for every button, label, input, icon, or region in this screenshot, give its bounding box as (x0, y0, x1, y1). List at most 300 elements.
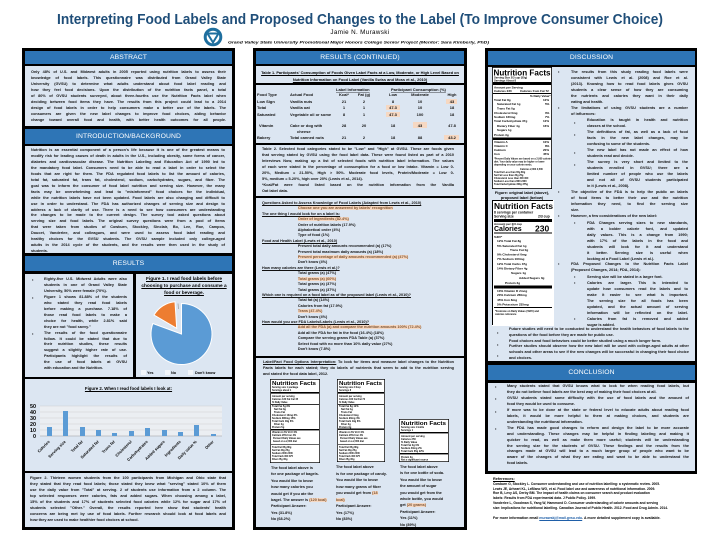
introduction text: the mandatory food label. Consumers need to be able to read a label in order to select the (31, 166, 225, 170)
discussion sub-points: confusing to some of the students. (587, 142, 650, 146)
references: labels: Results from FDA experimental data. J Public Policy. 1999. (493, 496, 596, 500)
table notes text: 5%, medium = 5-20%, high over 20% (Lewis et al., 2014). (262, 177, 363, 181)
data table: Low (389, 92, 398, 97)
nutrition label 2: Sat Fat 1g (341, 408, 353, 411)
data table: 10 (418, 105, 423, 110)
conclusion text: and understanding. These changes may be helpful in finding labeling and making it (507, 432, 689, 436)
discussion point 1: students a clear sense of how they are consuming (571, 88, 688, 92)
discussion notes: Further studies should observe how the new label will be used with college-aged adults at other (509, 344, 689, 348)
data table: High (448, 92, 457, 97)
introduction text: serving size and food labels. The original survey questions were from a pool of items (31, 219, 225, 223)
nutrition facts original label: Sat Fat Less than 20g 25g (494, 174, 524, 177)
author name: Jamie N. Murawski (330, 29, 390, 36)
nutrition label 1: Sat Fat 3g (274, 408, 286, 411)
data table: Actual Food (290, 92, 314, 97)
nutrition label 1: Calories 130 Fat Cal 45 (272, 398, 299, 401)
nutrition label 2: Sodium 2400 2400 (339, 452, 360, 455)
nutrition facts proposed label: Protein 3g (505, 281, 520, 285)
data table: 43 (450, 99, 455, 104)
label 2 caption: kcal) (336, 498, 345, 502)
discussion point 5: FDA Proposed Changes to the Nutrition Facts Label (571, 262, 688, 266)
discussion notes (509, 327, 689, 360)
nutrition facts original label: 7% (545, 115, 550, 119)
discussion point 3 (571, 190, 688, 212)
table notes text: *Kcal/Fat were found listed based on the nutrition information from the Vanilla (262, 183, 454, 187)
discussion notes: Future studies will need to be conducted to understand the health behaviors of food labels to the (509, 327, 689, 331)
bar chart: Added sugars (144, 439, 166, 461)
data table: Moderate (411, 92, 430, 97)
nutrition label 1: Calcium 20% Iron 4% (272, 434, 297, 437)
label 2 caption: you would get from (18 (336, 491, 378, 495)
data table: Cake or dog with (290, 123, 323, 128)
nutrition label 2: Fiber 25g 30g (339, 458, 355, 461)
legend (141, 370, 216, 375)
nutrition label 3: Amount per serving (401, 435, 425, 438)
chart title: food or beverage. (164, 291, 204, 296)
abstract text: change toward overall food and health, with better health outcomes for all people. (31, 118, 226, 122)
bar chart (30, 404, 222, 462)
nutrition facts proposed label: 20% Calcium 260mg (497, 293, 527, 297)
nutrition facts original label (492, 67, 552, 189)
nutrition facts original label: Servings About 8 (494, 78, 517, 82)
panel: figure 1 pie chart (136, 274, 232, 377)
label 3 caption: Yes (11%) (400, 516, 418, 520)
discussion sub-points: The definitions of fat, as well as a lack of food (587, 130, 688, 134)
table notes text: 20%, Medium = 21-50%, High > 50%. Moderate food levels, Protein/Moderate = Low 0- (262, 171, 454, 175)
nutrition facts proposed label: 5% Potassium 235mg (497, 302, 529, 306)
conclusion text: changes made at GVSU will lead to a much larger group of people who want to be (507, 449, 689, 453)
bar chart: 10 (30, 428, 36, 434)
panel: abstract (25, 66, 232, 126)
introduction text: Doucet, Vanderlee, and colleagues, and were used to assess food label reading and (31, 231, 225, 235)
discussion sub-points 3: updated, and the actual amount of serving (587, 305, 688, 309)
nutrition facts original label: Cholesterol Less than 300 300 (494, 177, 529, 180)
nutrition facts original label: Total Fat Less than 65g 80g (494, 171, 526, 174)
nutrition facts proposed label: 8 servings per container (494, 210, 534, 214)
nutrition label 1: Protein 5g (272, 426, 285, 429)
references: Cowburn G, Stockley L. Consumer understanding and use of nutrition labelling: a systematic review. 2005. (493, 482, 660, 486)
panel: table notes (256, 145, 464, 196)
bar chart: 40 (30, 410, 36, 416)
heading: results (25, 256, 232, 271)
results bullet text: students in one of Grand Valley State (44, 283, 127, 287)
nutrition label 2: Trans Fat (341, 411, 352, 414)
bullet marker: • (558, 105, 559, 110)
discussion sub-points 3 (587, 275, 688, 327)
conclusion text: labels, it would be more helpful to them at making choices, and students are (507, 414, 689, 418)
discussion sub-points 3: update how consumers read the labels and to (587, 287, 688, 291)
discussion sub-points: classes at the school. (587, 124, 626, 128)
panel: figure 2 bar chart (25, 379, 232, 471)
data table: 1 (363, 105, 366, 110)
discussion sub-points 2: daily values. This is a change from 1990; (587, 233, 688, 237)
table notes text: Oat label data. (262, 189, 288, 193)
chart title: Figure 2. When I read food labels I look at: (85, 386, 172, 391)
data table: Label Information (336, 87, 370, 92)
nutrition label 2: Total Carb 19g 6% (339, 420, 361, 423)
panel: discussion (488, 67, 695, 361)
label 1 caption: for one package of bagels. (271, 472, 319, 476)
label 1 caption: The food label above is (271, 466, 313, 470)
nutrition facts original label: 0% (545, 111, 550, 115)
label 2 caption: how many grams of fiber (336, 484, 381, 488)
bar chart: 20 (30, 422, 36, 428)
full-width bullet markers: • (497, 342, 498, 346)
abstract text: deciding between food items they have. The results from this project could lead to a 2014 (31, 100, 226, 104)
introduction text: the changes to be made to the current design. The survey tool asked questions about (31, 213, 225, 217)
heading: introduction (25, 129, 232, 144)
data table: 18 (391, 123, 396, 128)
nutrition label 2: Vitamin A 2% Vit C 6% (339, 431, 365, 434)
results bullet text: Participants highlight the results of (44, 354, 127, 358)
introduction text: facts may be overwhelming and lead to "misinformed" food choices for the individual, (31, 190, 225, 194)
bullet marker: • (558, 69, 559, 74)
discussion sub-points 2: with a bolder calorie font, and updated (587, 227, 688, 231)
discussion point 1 (571, 70, 688, 104)
nutrition label 1: Trans Fat (274, 411, 285, 414)
conclusion text: food labels. (507, 461, 528, 465)
label 1 caption: would get if you ate the (271, 492, 313, 496)
nutrition label 3: Not a significant source (401, 458, 429, 462)
nutrition label 3: Total Carb 65g 22% (401, 450, 425, 453)
references (493, 477, 668, 510)
nutrition label 3: Servings 1 (401, 429, 414, 432)
nutrition label 2: Cholesterol 0mg (339, 414, 359, 417)
nutrition facts original label: % Daily Value* (530, 94, 551, 98)
nutrition label 2: Calories 160 Cal Fat 72 (339, 398, 366, 401)
nutrition facts original label: diet. Your daily value may be higher or lower (494, 160, 545, 164)
nutrition label 1: Total Carb 18g 6% (272, 420, 294, 423)
column frame: middle (253, 48, 467, 530)
references: Roe B, Levy AS, Derby BM. The impact of health claims on consumer search and product evaluation (493, 491, 650, 495)
caption text (30, 476, 226, 522)
panel: label comparison (256, 358, 464, 527)
nutrition label 3: % Daily Value (401, 441, 418, 444)
nutrition facts original label: Serving Size 2/3 cup (55g) (494, 76, 527, 80)
results bullet text: their nutrition studies, these results (44, 342, 127, 346)
nutrition label 1: based on a 2,000 diet (273, 440, 297, 443)
results bullet text: Eighty-five U.S. Midwest Adults were also (44, 277, 127, 281)
abstract text: how they feel food decisions. Upon the distribution of the nutrition facts panel, a total (31, 88, 226, 92)
nutrition label 3: Serving size 1 bottle (401, 426, 425, 429)
references: References: (493, 477, 515, 481)
data table: 2 (363, 135, 366, 140)
nutrition label 1: Fiber 2g (274, 423, 284, 426)
nutrition facts proposed label: Amount per 2/3 cup (494, 222, 522, 226)
nutrition label 1: Vitamin A 2% Vit C 6% (272, 431, 298, 434)
discussion point 3: size. (571, 208, 579, 212)
discussion sub-points: and not all of GVSU students participated (587, 178, 688, 182)
nutrition label 2: Servings 8 (339, 389, 352, 392)
nutrition facts original label: Trans Fat 0g (497, 106, 515, 110)
panel: introduction (25, 146, 232, 253)
references: size: Implications for nutritional labelling. Canadian Journal of Public Health. 2012. Food and Drug Admin. 2014. (493, 506, 668, 510)
discussion sub-points: limited number of people who use the labels (587, 172, 688, 176)
introduction text: Nutrition is an essential component of a person's life because it is one of the greatest means to (31, 148, 225, 152)
nutrition label 2: Nutrition Facts (339, 381, 382, 387)
data table: Bakery (257, 135, 271, 140)
nutrition label 2: Percent Daily Values are (340, 437, 368, 440)
full-width bullet markers: • (497, 330, 498, 335)
nutrition facts proposed label: *Footnote on Daily Values (%DV) and (495, 310, 539, 313)
discussion sub-points 3: make it easier to see what is important. (587, 293, 688, 297)
sub-bullet markers: • (574, 120, 575, 125)
nutrition label 2: Amount per serving (339, 395, 362, 398)
nutrition facts proposed label: calories reference (495, 313, 517, 316)
label 3 caption: The food label above (400, 465, 438, 469)
panel: nutrition table (256, 85, 464, 143)
nutrition facts proposed label: 230 (535, 224, 549, 234)
caption text: top selected responses were calories, fats and added sugars. When choosing among a label, (30, 494, 226, 498)
label 1 caption: You would like to know (271, 479, 313, 483)
nutrition facts proposed label: Calories (494, 226, 522, 233)
nutrition facts original label: Calories 2,000 2,500 (520, 168, 543, 171)
nutrition label 1: Servings about 1 (272, 389, 292, 392)
full-width bullet markers (497, 330, 498, 358)
discussion sub-points 2: it better. Serving size is useful when (587, 251, 688, 255)
results bullet text: choice for health, while 2.81% said (44, 319, 127, 323)
panel: table title (256, 66, 464, 83)
heading: discussion (488, 51, 695, 65)
nutrition label 3 (399, 419, 449, 462)
data table: 28 (342, 123, 347, 128)
label 1 caption: Participant Answer: (271, 504, 307, 508)
legend: Yes (147, 371, 154, 375)
nutrition facts original label: Total Carbohydrate 37g (494, 119, 527, 123)
data table: 2 (363, 99, 366, 104)
conclusion text: food they would be used to consume. (507, 402, 575, 406)
legend: Don't know (195, 371, 215, 375)
abstract text: of 80% of GVSU students surveyed, about three-fourths use the Nutrition Facts label when (31, 94, 226, 98)
label 1 caption: how many calories you (271, 485, 313, 489)
conclusion text (507, 384, 690, 465)
results bullet text (44, 277, 128, 370)
heading: abstract (25, 51, 232, 64)
nutrition facts proposed label: 7% Sodium 160mg (497, 257, 524, 261)
nutrition facts proposed label: %DV* (494, 235, 503, 239)
intro text: Label/Fact Food Options Interpretation: To look for items and measure label changes to the Nutrition (263, 360, 454, 364)
data table: 10 (418, 99, 423, 104)
bar chart: Cholesterol (114, 439, 133, 458)
pie chart (150, 301, 212, 365)
label comparison caption: Figure: original label (above), (495, 190, 549, 195)
discussion point 2 (571, 106, 688, 116)
data table: Saturated (257, 112, 276, 117)
nutrition label 1: Total Fat 65g 80g (272, 446, 292, 449)
results bullet text: with education and the Nutrition. (44, 366, 103, 370)
label 3 caption: You would like to know (400, 478, 442, 482)
heading: abstract: ABSTRACT (110, 54, 147, 61)
discussion notes: and choices. (509, 356, 532, 360)
discussion sub-points 2: FDA Changes serving sizes to new standards, (587, 221, 688, 225)
heading: conclusion (488, 365, 695, 380)
abstract text: Only 48% of U.S. and Midwest adults in 2005 reported using nutrition labels to assess their (31, 70, 226, 74)
label 3 caption: No (89%) (400, 523, 416, 527)
label 2 caption: is for one package of candy. (336, 472, 387, 476)
data table: 8 (343, 112, 346, 117)
label 3 caption: Participant Answer: (400, 510, 436, 514)
nutrition facts proposed label: 0% Cholesterol 0mg (497, 252, 527, 256)
nutrition label 2: Sodium 90mg 4% (339, 417, 360, 420)
bullet marker: • (558, 189, 559, 194)
data table: Food Type (257, 92, 278, 97)
panel: questionnaire results (256, 198, 464, 356)
discussion notes: questions of the food before they are made for public use. (509, 333, 614, 337)
bullet marker: • (495, 384, 496, 389)
results bullet text: before making a purchase. 7.18% of (44, 307, 127, 311)
sub-bullet markers: • (574, 162, 575, 167)
caption text: how they are used to make healthier food choices at school. (30, 518, 139, 522)
nutrition facts original label: Calories 230 (494, 89, 512, 93)
data table: 21 (342, 99, 347, 104)
bar chart: Ingredients (163, 439, 182, 458)
nutrition facts original label: 5% (545, 102, 550, 106)
discussion point 5 (571, 262, 688, 272)
intro text: Facts labels for each stated; they do labels of nutrients that seem to add to the nutrition serving (263, 366, 454, 370)
discussion sub-points: students enrolled in GVSU; there are a (587, 166, 688, 170)
bar chart: Other (204, 439, 215, 450)
results bullet text: University, 50% were female (70%). (44, 289, 107, 293)
panel: figure caption (25, 473, 232, 527)
nutrition facts original label: Saturated Fat 1g (497, 102, 521, 106)
data table: 21 (342, 135, 347, 140)
conclusion text: quicker to read, as well as make them more useful; students will be understanding (507, 438, 689, 442)
discussion point 3: information they need, to find the serving size (571, 202, 688, 206)
nutrition label 2: % Daily Value (339, 401, 355, 404)
nutrition facts original label: Total Fat 8g (494, 98, 511, 102)
table notes text: that serving stated by GVSU using the food label data. These were found listed as part of a 2010 (262, 153, 454, 157)
heading: results continued: RESULTS (CONTINUED) (320, 54, 400, 61)
bullet marker: • (495, 409, 496, 414)
nutrition label 2: Serving size 2 tbsp (339, 386, 361, 389)
heading: discussion: DISCUSSION (570, 54, 613, 61)
introduction text: adults in the 2014 cycle of the students, and the results were then used in the study of (31, 243, 225, 247)
caption text: 15% of the students and 17% of students selected food calories while 12% for sugar and 17% of (30, 500, 226, 504)
legend: No (171, 371, 177, 375)
nutrition facts original label: Sodium 160mg (494, 115, 516, 119)
label 1 caption (271, 466, 327, 521)
bar chart: Trans fat (101, 439, 116, 454)
sub-bullet marker: • (574, 220, 575, 225)
discussion point 1: The results from this study reading food labels were (571, 70, 688, 74)
results bullet text: suggest a slightly higher rate of use. (44, 348, 127, 352)
data table: 18 (450, 112, 455, 117)
sub-bullet markers: • (574, 132, 575, 137)
introduction text: students. (31, 249, 48, 253)
nutrition label 1 (270, 379, 320, 463)
sub-bullet markers 2 (574, 274, 576, 321)
discussion sub-points: in it (Lewis et al., 2008). (587, 184, 629, 188)
label 2 caption: Participant Answer: (336, 504, 372, 508)
nutrition facts original label: Iron (494, 152, 500, 156)
discussion sub-points 3: sugar is added. (587, 323, 615, 327)
discussion point 1: the nutrients and calories they want in their daily (571, 94, 688, 98)
nutrition facts original label: Cholesterol 0mg (494, 111, 518, 115)
chart title: Figure 1. I read food labels before (146, 277, 222, 282)
data table: 43.2 (448, 135, 457, 140)
bar chart: Saturated fat (79, 439, 100, 460)
introduction text: foods that are right for them. The FDA regulated food labels to list the amount of calories, (31, 172, 225, 176)
nutrition label 1: Percent Daily Values are (273, 437, 301, 440)
intro text: and stated the food data label, 2012. (263, 372, 328, 376)
bullet marker: • (558, 261, 559, 266)
data table: 100 (417, 112, 424, 117)
abstract text: design of food labels in order to help consumers make a better use of the labels. The (31, 106, 226, 110)
nutrition facts original label: Vitamin C (494, 144, 509, 148)
intro text (263, 360, 454, 376)
data table: Kcal* (339, 92, 349, 97)
introduction text: use in order to understand. The FDA has authorized changes of serving size and design to (31, 202, 225, 206)
discussion point 3: The objective of the FDA is to help the public on labels (571, 190, 688, 194)
caption text: they stated that they read food labels; those stated they knew what "serving" stated 10% of them (30, 482, 226, 486)
discussion sub-points 2: with 17% of the labels in the food and (587, 239, 688, 243)
data table: 1 (343, 105, 346, 110)
nutrition label 1: Total Carb 300 375 (272, 455, 294, 458)
panel: results bullets (25, 274, 133, 377)
data table: 47.3 (389, 112, 398, 117)
data table: cheese (297, 129, 311, 134)
nutrition label 2: Calcium 20% Iron 4% (339, 434, 364, 437)
bullet marker: • (495, 396, 496, 401)
bar chart: 50 (30, 404, 36, 410)
nutrition label 2: Total Carb 300 375 (339, 455, 361, 458)
data table (257, 87, 459, 140)
bar chart: Daily value % (177, 439, 198, 460)
caption text: students selected "Other." Overall, the results reported here show that students' health (30, 506, 226, 510)
chart title (141, 276, 227, 296)
introduction text: diabetes and cardiovascular disease. The Nutrition Labeling and Education Act of 1990 led to (31, 160, 225, 164)
nutrition facts proposed label: 5% Saturated Fat 1g (497, 244, 527, 248)
nutrition label 2: Sat Fat 20g 25g (339, 449, 357, 452)
label 1 caption: bagel. The answer is (120 kcal) (271, 498, 327, 502)
data table: 8 (392, 99, 395, 104)
nutrition label 3: Total Fat 0g 0% (401, 444, 420, 447)
discussion sub-points 3: The serving size for all foods has been (587, 299, 688, 303)
sub-bullet markers 2: • (574, 274, 575, 279)
nutrition label 1: % Daily Value (272, 401, 288, 404)
conclusion text: The FDA has made good changes to reform and design the label to be more accurate (507, 426, 689, 430)
results bullet text: Figure 1 shows 81.88% of the students (44, 295, 127, 299)
affiliation: Grand Valley State University Promotional Major Honors College Senior Project (Mentor: Sara Kimberly, PhD) (228, 40, 490, 44)
results bullet text: the use of food labels at GVSU (44, 360, 127, 364)
nutrition facts original label: Amount per Serving (494, 86, 523, 90)
nutrition facts original label: Sugars 1g (497, 128, 512, 132)
discussion sub-points 2: students will look for it and understand (587, 245, 688, 249)
conclusion text: GVSU students stated some difficulty with the use of food labels and the amount of (507, 396, 689, 400)
nutrition facts proposed label (492, 200, 554, 326)
conclusion text: If more was to be done at the state or federal level to educate adults about reading food (507, 408, 689, 412)
bullet marker: • (32, 331, 33, 336)
discussion sub-points 3: information will be reflected on the label. (587, 311, 688, 315)
sub-bullet markers (574, 120, 576, 167)
results bullet text: those read food labels to make a (44, 313, 127, 317)
data table: Total canned nuts (290, 135, 325, 140)
caption text: use the daily value from "Total" at serving. 2 of students use information from a 2 column. The (30, 488, 226, 492)
caption text: concerns are being met by use of food labels. Further research should look at food labels and (30, 512, 226, 516)
nutrition facts original label: *Percent Daily Values are based on a 2,000 calorie (494, 158, 551, 160)
data table: Participant Consumption (%) (391, 87, 447, 92)
data table: Total (257, 105, 266, 110)
nutrition facts proposed label: 10% Vitamin D 2mcg (497, 289, 527, 293)
conclusion text: the serving size for the students of GVSU. These findings and the results from the (507, 444, 689, 448)
nutrition facts proposed label: Sugars 1g (511, 271, 526, 275)
discussion sub-points 2 (587, 221, 688, 261)
discussion sub-points: Education is taught in health and nutrition (587, 118, 688, 122)
conclusion text: they do not believe food labels are the best way of making their food choices at all. (507, 390, 657, 394)
data table: 18 (450, 105, 455, 110)
nutrition label 1: Sodium 380mg 15% (272, 417, 296, 420)
discussion point 1: eating and health. (571, 100, 603, 104)
